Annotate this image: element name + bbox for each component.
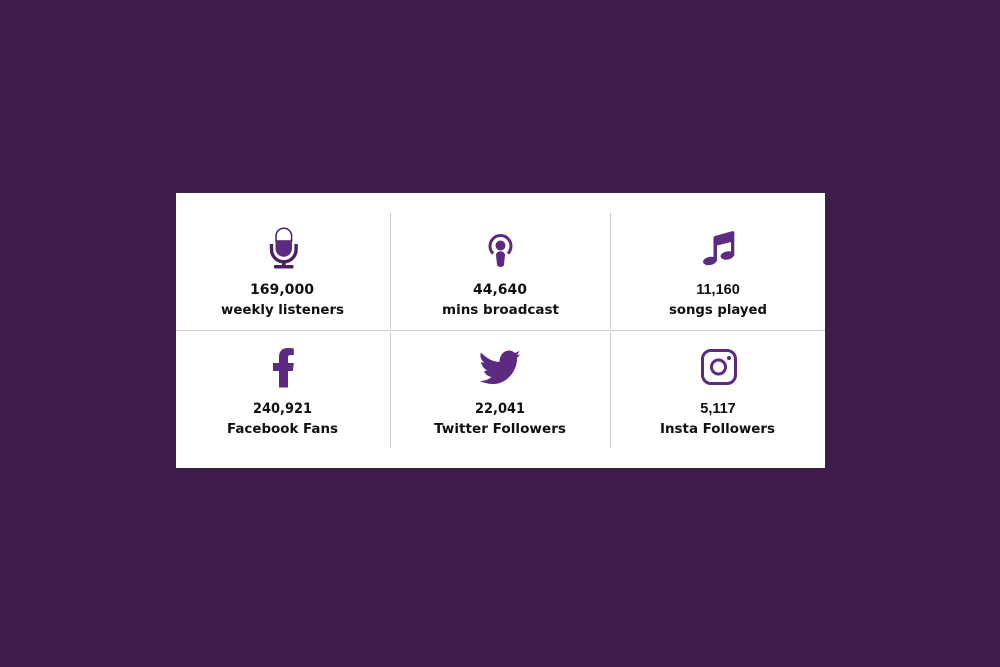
- icon: instagram: [702, 350, 736, 384]
- stat: Twitter Followers: [434, 350, 566, 437]
- icon: music note: [702, 231, 735, 266]
- number: 240,921: 240,921: [253, 401, 312, 417]
- icon: podcast: [490, 236, 511, 267]
- number: 22,041: 22,041: [475, 401, 525, 417]
- number: 169,000: 169,000: [250, 282, 314, 298]
- icon: facebook: [273, 348, 294, 388]
- stat: mins broadcast: [442, 236, 560, 318]
- panel: stats card: [176, 193, 825, 468]
- icon: twitter bird: [480, 350, 520, 384]
- label: Twitter Followers: Twitter Followers: [434, 422, 566, 437]
- label: mins broadcast: mins broadcast: [442, 303, 560, 318]
- stat: Facebook Fans: [227, 348, 338, 437]
- label: weekly listeners: weekly listeners: [221, 303, 344, 318]
- stat: songs played: [669, 231, 767, 318]
- label: songs played: songs played: [669, 303, 767, 318]
- number: 5,117: 5,117: [700, 401, 736, 417]
- number: 44,640: 44,640: [473, 282, 527, 298]
- stat: Insta Followers: [660, 350, 775, 437]
- label: Insta Followers: Insta Followers: [660, 422, 775, 437]
- icon: microphone: [272, 228, 296, 268]
- stat: weekly listeners: [221, 228, 344, 318]
- label: Facebook Fans: Facebook Fans: [227, 422, 338, 437]
- number: 11,160: 11,160: [696, 282, 740, 298]
